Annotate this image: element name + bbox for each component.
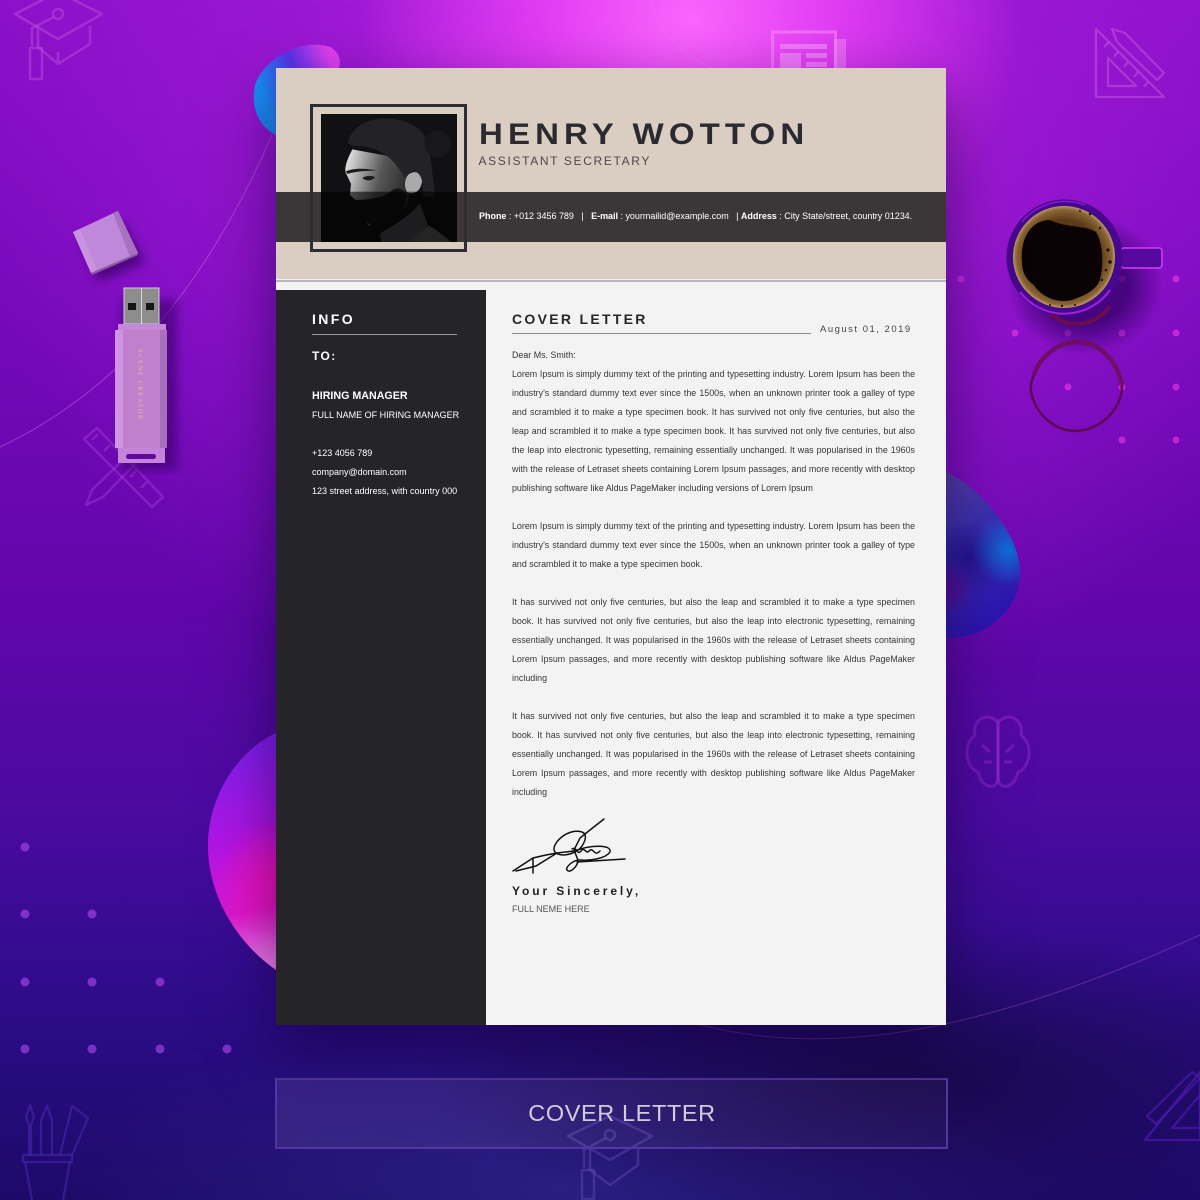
- paragraph 4: [512, 711, 915, 797]
- name: HENRY WOTTON: [479, 118, 809, 151]
- sidebar: info heading: INFO: [312, 311, 355, 327]
- icon: ruler and pencil cross: [84, 428, 163, 507]
- paragraph 3: including: [512, 673, 547, 683]
- paragraph 2: and scrambled it to make a type specimen book.: [512, 559, 702, 569]
- paragraph 1: the leap into electronic typesetting, remaining essentially unchanged. It was popularised in the 1960s: [512, 445, 915, 455]
- paragraph 3: It has survived not only five centuries, but also the leap and scrambled it to make a type specimen: [512, 597, 915, 607]
- paragraph 4: book. It has survived not only five centuries, but also the leap into electronic typesetting, remaining: [512, 730, 915, 740]
- blob: right: [946, 472, 1020, 638]
- dots: left grid: [20, 842, 232, 1054]
- paragraph 3: essentially unchanged. It was popularised in the 1960s with the release of Letraset sheets containing: [512, 635, 915, 645]
- signature: [512, 818, 626, 874]
- icon: USB drive: SCENE CREATOR: [136, 349, 144, 421]
- paragraph 1: [512, 369, 915, 493]
- icon: brain: [967, 717, 1029, 786]
- paragraph 4: essentially unchanged. It was popularised in the 1960s with the release of Letraset sheets containing: [512, 749, 915, 759]
- sign-off: Your Sincerely,: [512, 884, 641, 898]
- bun: [424, 138, 430, 154]
- bottom label box: [275, 1078, 948, 1149]
- paragraph 1: leap and scrambled it to make a type specimen book. It has survived not only five centuries, but also: [512, 426, 915, 436]
- sidebar: to heading: TO:: [312, 349, 337, 363]
- contact band: [276, 192, 946, 242]
- sidebar: email: company@domain.com: [312, 467, 407, 477]
- photo portrait: [321, 114, 457, 242]
- paragraph 2: industry's standard dummy text ever since the 1500s, when an unknown printer took a galley of type: [512, 540, 915, 550]
- sidebar: phone: +123 4056 789: [312, 448, 372, 458]
- icon: graduation cap bottom: [568, 1116, 652, 1199]
- bottom label text: COVER LETTER: [528, 1100, 716, 1126]
- header rule: [276, 280, 946, 282]
- sidebar rule: [312, 334, 457, 335]
- paragraph 2: [512, 521, 915, 569]
- shoulder: [408, 225, 452, 243]
- icon: USB cap: [73, 211, 148, 286]
- sidebar: recipient: HIRING MANAGER: [312, 390, 408, 402]
- paragraph 4: Lorem Ipsum passages, and more recently with desktop publishing software like Aldus PageMaker: [512, 768, 915, 778]
- heading rule: [512, 333, 811, 334]
- salutation: Dear Ms. Smith:: [512, 350, 576, 360]
- dots: right grid: [958, 276, 1180, 444]
- date: August 01, 2019: [820, 324, 912, 335]
- sidebar: address: 123 street address, with country 000: [312, 486, 457, 496]
- icon: coffee cup: [1006, 200, 1163, 352]
- photo frame: [310, 104, 467, 252]
- contact details: Phone : +012 3456 789 | E-mail : yourmailid@example.com | Address : City State/street, country 01234.: [479, 211, 912, 221]
- letter heading: COVER LETTER: [512, 311, 648, 327]
- paragraph 2: Lorem Ipsum is simply dummy text of the printing and typesetting industry. Lorem Ipsum has been the: [512, 521, 915, 531]
- job title: ASSISTANT SECRETARY: [478, 154, 651, 168]
- paragraph 3: book. It has survived not only five centuries, but also the leap into electronic typesetting, remaining: [512, 616, 915, 626]
- paragraph 1: with the release of Letraset sheets containing Lorem Ipsum passages, and more recently with desktop: [512, 464, 915, 474]
- eye and brow: [346, 169, 377, 180]
- paragraph 4: including: [512, 787, 547, 797]
- signer name: FULL NEME HERE: [512, 904, 590, 914]
- icon: set square top right: [1096, 29, 1164, 97]
- paragraph 1: industry's standard dummy text ever since the 1500s, when an unknown printer took a galley of type: [512, 388, 915, 398]
- icon: graduation cap top left: [15, 0, 102, 79]
- blob: top left: [254, 45, 340, 135]
- paragraph 3: Lorem Ipsum passages, and more recently with desktop publishing software like Aldus PageMaker: [512, 654, 915, 664]
- blob: lower left: [208, 733, 276, 970]
- icon: set square bottom right: [1145, 1072, 1200, 1140]
- ear: [405, 172, 422, 193]
- paragraph 3: [512, 597, 915, 683]
- icon: coffee stain ring: [1030, 340, 1124, 432]
- paragraph 1: and scrambled it to make a type specimen book. It has survived not only five centuries, but also the: [512, 407, 915, 417]
- sidebar background: [276, 290, 486, 1025]
- header background: [276, 68, 946, 279]
- paragraph 1: publishing software like Aldus PageMaker including versions of Lorem Ipsum: [512, 483, 813, 493]
- paragraph 1: Lorem Ipsum is simply dummy text of the printing and typesetting industry. Lorem Ipsum has been the: [512, 369, 915, 379]
- face: [345, 149, 412, 226]
- hair: [348, 118, 435, 197]
- document: [276, 68, 946, 1025]
- icon: pencil cup bottom left: [23, 1105, 88, 1200]
- sidebar: recipient name: FULL NAME OF HIRING MANAGER: [312, 410, 459, 420]
- icon: USB drive: [115, 288, 183, 475]
- paragraph 4: It has survived not only five centuries, but also the leap and scrambled it to make a type specimen: [512, 711, 915, 721]
- beard: [355, 188, 406, 225]
- icon: document top: [772, 32, 846, 68]
